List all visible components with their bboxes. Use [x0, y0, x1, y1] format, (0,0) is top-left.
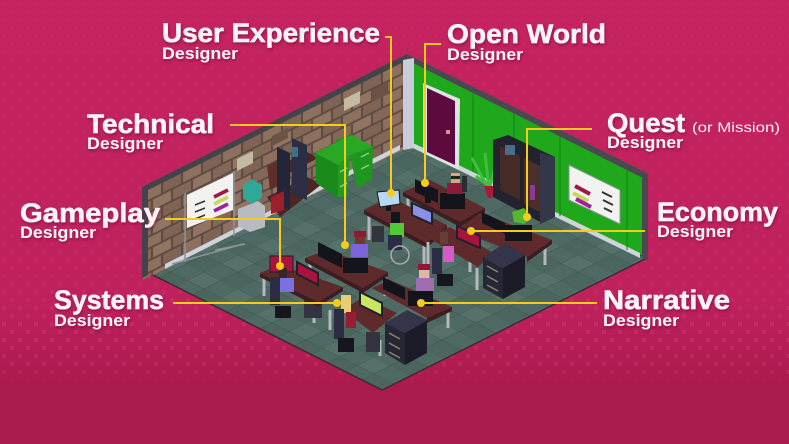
- monitor: user experience: [377, 190, 400, 211]
- desk: narrative: [372, 280, 452, 328]
- monitor: technical front: [343, 258, 368, 273]
- label: systems designer: [54, 285, 164, 330]
- line: systems: [173, 302, 337, 304]
- label: economy designer: [657, 197, 778, 241]
- desk: pink character: [427, 227, 493, 290]
- monitor: open world front: [440, 193, 465, 209]
- callout lines: [165, 37, 645, 303]
- label: user experience designer: Designer: [162, 44, 238, 63]
- label: user experience designer: User Experience: [162, 18, 380, 48]
- label: quest designer: [607, 108, 780, 152]
- label: gameplay designer: Designer: [20, 223, 96, 242]
- wall corner pillar: [403, 58, 414, 150]
- character: gameplay designer: [270, 268, 294, 318]
- line: user experience: [385, 37, 391, 193]
- character: open world designer: [447, 173, 467, 194]
- label: user experience designer: [162, 18, 380, 63]
- monitor: open world rear: [415, 179, 438, 203]
- desk: gameplay: [260, 265, 343, 330]
- label: quest designer: Quest: [607, 108, 685, 138]
- character: systems designer: [334, 295, 356, 352]
- floor: [143, 140, 647, 390]
- monitor: narrative rear: [383, 277, 405, 300]
- green wall: [407, 54, 648, 260]
- right shelves: [493, 135, 555, 224]
- left whiteboard: [172, 171, 245, 264]
- office room: [142, 54, 648, 390]
- monitor: systems green: [360, 292, 382, 316]
- monitor: economy front: [505, 225, 532, 241]
- monitor: technical rear: [318, 242, 342, 268]
- plant: [472, 153, 497, 198]
- monitors: [270, 179, 532, 316]
- label: gameplay designer: Gameplay: [20, 198, 160, 228]
- label: open world designer: Designer: [447, 45, 523, 64]
- line: open world: [425, 44, 441, 183]
- desk: economy: [457, 213, 552, 272]
- door: [423, 83, 460, 170]
- label: narrative designer: Narrative: [603, 285, 730, 315]
- label: economy designer: Designer: [657, 222, 733, 241]
- water cooler: [238, 179, 265, 232]
- characters: [270, 173, 532, 352]
- label: narrative designer: [603, 285, 730, 330]
- line: quest: [527, 129, 592, 217]
- label: open world designer: [447, 19, 606, 64]
- left shelves: [267, 138, 322, 217]
- cabinet: back: [483, 243, 525, 299]
- label: narrative designer: Designer: [603, 311, 679, 330]
- label: economy designer: Economy: [657, 197, 778, 227]
- character: quest designer: [512, 208, 532, 224]
- monitor: gameplay side: [297, 262, 318, 285]
- right whiteboard: [569, 165, 620, 224]
- label: open world designer: Open World: [447, 19, 606, 49]
- character: technical designer: [351, 231, 368, 257]
- desk: user experience: [364, 197, 447, 270]
- monitor: economy rear: [482, 212, 505, 234]
- green filing cabinets: [315, 135, 373, 198]
- cabinet: front: [385, 310, 427, 365]
- line: economy: [471, 230, 645, 232]
- monitor: gameplay rear: [270, 256, 293, 272]
- label: technical designer: [87, 109, 214, 153]
- black filing cabinets: [385, 243, 525, 365]
- callout dots: [276, 179, 531, 307]
- label: systems designer: Designer: [54, 311, 130, 330]
- character: narrative designer: [416, 264, 434, 291]
- desk: systems: [343, 297, 397, 356]
- monitor: narrative front: [408, 291, 433, 306]
- desks: [260, 180, 552, 356]
- monitor: economy red: [457, 226, 480, 248]
- desk: technical: [305, 250, 388, 312]
- label: systems designer: Systems: [54, 285, 164, 315]
- monitor: blue: [412, 203, 432, 224]
- desk: open world: [403, 180, 485, 238]
- label: gameplay designer: [20, 198, 160, 242]
- line: gameplay: [165, 219, 280, 266]
- character: economy-row designer: [432, 232, 454, 286]
- label: quest designer: (or Mission): [692, 119, 780, 135]
- line: technical: [230, 125, 345, 245]
- character: user experience designer: [388, 212, 409, 264]
- brick wall: [142, 54, 407, 280]
- label: technical designer: Designer: [87, 134, 163, 153]
- label: technical designer: Technical: [87, 109, 214, 139]
- line: narrative: [421, 302, 597, 304]
- label: quest designer: Designer: [607, 133, 683, 152]
